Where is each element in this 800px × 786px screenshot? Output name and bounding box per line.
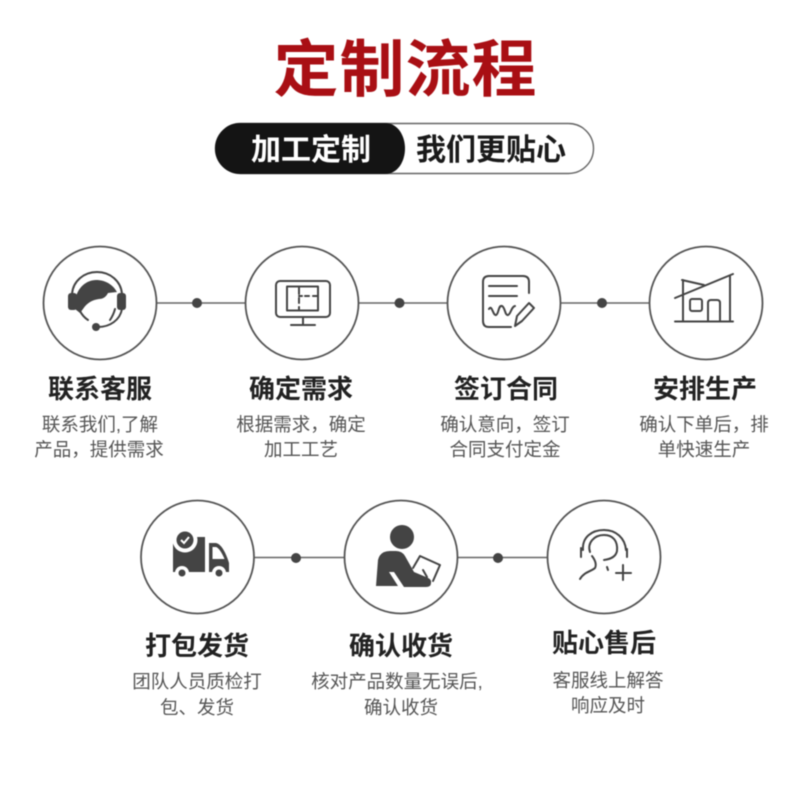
- step: 确定需求: 加工工艺: [264, 439, 338, 460]
- step: 确定需求: [236, 246, 366, 460]
- circle: [344, 500, 458, 614]
- step: 联系客服: [34, 246, 164, 460]
- heading: 打包发货: [145, 631, 249, 661]
- icon: house: [675, 274, 733, 322]
- heading: 签订合同: [454, 374, 558, 404]
- step: 签订合同: [440, 246, 570, 460]
- icon: monitor with floor plan: [276, 281, 330, 325]
- step: 贴心售后: [548, 500, 664, 716]
- description: 核对产品数量无误后,: [311, 671, 483, 692]
- banner pill: [215, 123, 594, 174]
- step: 打包发货: [132, 500, 262, 718]
- heading: 联系客服: [48, 374, 152, 404]
- description: 联系我们,了解: [42, 414, 158, 435]
- step: 签订合同: 合同支付定金: [449, 439, 561, 460]
- step: 打包发货: 包、发货: [160, 697, 234, 718]
- circle: [44, 246, 156, 360]
- heading: 确认收货: [349, 631, 453, 661]
- description: 确认意向，签订: [440, 414, 570, 435]
- step: 安排生产: [639, 246, 769, 460]
- circle: [650, 246, 762, 360]
- icon: delivery truck: [172, 528, 229, 580]
- icon: agent outline with plus: [580, 530, 631, 580]
- description: 团队人员质检打: [132, 671, 262, 692]
- step: 安排生产: 单快速生产: [658, 439, 750, 460]
- description: 确认下单后，排: [639, 414, 769, 435]
- circle: [246, 246, 358, 360]
- step: 贴心售后: 响应及时: [571, 695, 645, 716]
- step: 确认收货: [311, 500, 483, 718]
- title: 定制流程: [274, 36, 537, 105]
- circle: [448, 246, 560, 360]
- connector row 2: [253, 553, 548, 563]
- description: 客服线上解答: [552, 670, 664, 691]
- step: 联系客服: 产品，提供需求: [34, 439, 164, 460]
- circle: [548, 500, 660, 614]
- heading: 安排生产: [653, 374, 757, 404]
- description: 根据需求，确定: [236, 414, 366, 435]
- heading: 贴心售后: [552, 628, 656, 658]
- icon: person with clipboard: [376, 525, 440, 587]
- icon: headset agent: [68, 272, 126, 331]
- icon: contract with pen: [483, 276, 534, 327]
- banner label: left: 加工定制: [251, 134, 371, 167]
- connector row 1: [156, 298, 650, 308]
- banner label: right: 我们更贴心: [416, 134, 566, 167]
- step: 确认收货: 确认收货: [364, 697, 438, 718]
- circle: [141, 500, 254, 614]
- heading: 确定需求: [249, 374, 353, 404]
